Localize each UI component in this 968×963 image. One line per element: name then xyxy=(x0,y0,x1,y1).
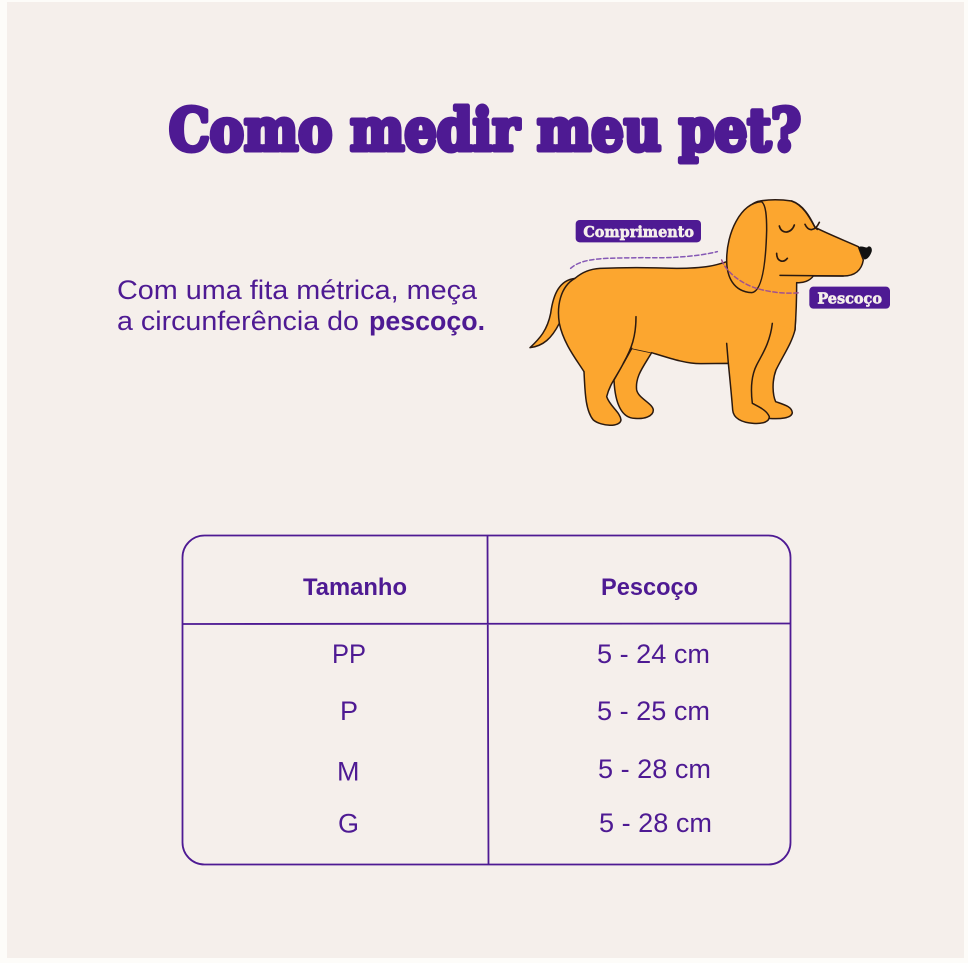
label: Comprimento: Comprimento xyxy=(583,223,694,241)
table header: Pescoço xyxy=(601,574,698,601)
title: Como medir meu pet? xyxy=(169,96,801,164)
table frame and grid lines xyxy=(182,536,790,864)
neck measure column: 5 - 24 cm xyxy=(597,639,710,669)
dog body outline xyxy=(558,200,863,425)
neck measure column: 5 - 28 cm xyxy=(599,808,712,838)
size column: G xyxy=(338,808,359,838)
dog tail xyxy=(530,278,577,348)
dog nose xyxy=(858,246,872,259)
neck dashed line xyxy=(722,260,800,293)
dog far back leg xyxy=(614,348,653,419)
dog face lines xyxy=(777,222,819,261)
table header xyxy=(303,574,698,601)
size column: PP xyxy=(332,639,366,669)
instruction text xyxy=(117,275,485,336)
size column: M xyxy=(337,756,360,786)
dog crease lines xyxy=(623,201,843,363)
length dashed line xyxy=(571,252,717,268)
label: Pescoço xyxy=(809,287,890,309)
neck measure column xyxy=(597,639,712,838)
size column: P xyxy=(340,696,358,726)
dog far front leg xyxy=(743,317,796,419)
illustration: dog with measurement lines xyxy=(530,200,890,425)
neck measure column: 5 - 28 cm xyxy=(598,754,711,784)
dog body and head fill xyxy=(558,200,863,425)
instruction text: Com uma fita métrica, meça xyxy=(117,275,478,305)
table header: Tamanho xyxy=(303,574,407,601)
dog ear xyxy=(727,202,767,293)
label: Pescoço: Pescoço xyxy=(817,290,882,308)
neck measure column: 5 - 25 cm xyxy=(597,696,710,726)
instruction text: pescoço. xyxy=(369,306,485,336)
instruction text: a circunferência do xyxy=(117,306,359,336)
size table xyxy=(182,536,790,864)
size column xyxy=(332,639,366,838)
